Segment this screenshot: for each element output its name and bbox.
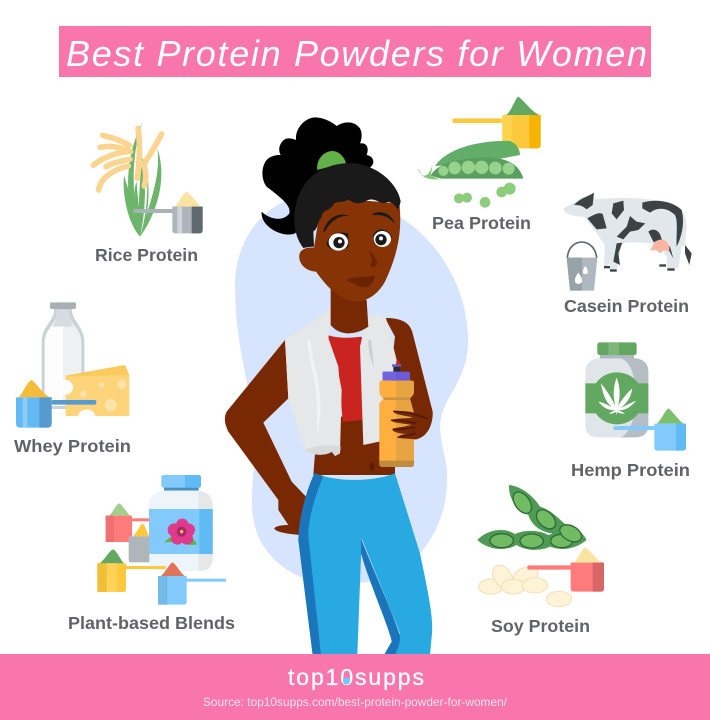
- udder: [650, 240, 669, 253]
- panel: plant-based blends: [68, 475, 235, 633]
- milk pail: [567, 242, 597, 291]
- face: [299, 198, 400, 301]
- label: Hemp Protein: [571, 460, 690, 480]
- label: Pea Protein: [432, 213, 531, 233]
- navel: [369, 462, 375, 471]
- nose: [369, 250, 377, 267]
- label: Soy Protein: [491, 616, 590, 636]
- scoop: [452, 97, 541, 148]
- label: Plant-based Blends: [68, 613, 235, 633]
- icon: milk, cheese and scoop: [16, 302, 129, 428]
- label: Rice Protein: [95, 245, 198, 265]
- cow: [563, 193, 692, 272]
- logo: top10supps: [288, 664, 424, 690]
- panel: casein protein: [563, 193, 692, 316]
- jar: [149, 475, 213, 571]
- label: Casein Protein: [564, 296, 689, 316]
- lower body: [225, 308, 433, 655]
- eyes: [327, 229, 392, 251]
- panel: rice protein: [93, 123, 203, 265]
- red scoop: [106, 503, 149, 542]
- grains: [93, 128, 162, 190]
- left arm: [225, 340, 306, 535]
- red top: [327, 335, 400, 422]
- woman figure: [225, 117, 433, 655]
- milk bottle: [42, 302, 84, 409]
- blue scoop: [158, 562, 226, 605]
- torso: [313, 417, 395, 475]
- right arm: [385, 318, 433, 439]
- beans: [479, 561, 572, 607]
- icon: cow and milk pail: [563, 193, 692, 291]
- pod: [418, 141, 523, 179]
- icon: jar, flower and scoops: [97, 475, 226, 605]
- cheese: [58, 365, 129, 416]
- scoop: [527, 547, 604, 592]
- panel: whey protein: [14, 302, 131, 456]
- head: [262, 117, 401, 333]
- panel: pea protein: [418, 97, 541, 233]
- leaves: [124, 123, 161, 237]
- icon: rice plant with scoop: [93, 123, 203, 237]
- towel: [285, 308, 397, 456]
- pods: [477, 485, 587, 550]
- title: Best Protein Powders for Women: [66, 33, 647, 74]
- eyebrows: [323, 212, 395, 232]
- yellow scoop: [97, 549, 166, 592]
- background blob: [235, 194, 468, 584]
- loose peas: [454, 183, 516, 208]
- leggings: [298, 473, 432, 655]
- panel: hemp protein: [571, 342, 690, 480]
- hand on bottle: [392, 398, 428, 439]
- source: Source: top10supps.com/best-protein-powder-for-women/: [203, 695, 508, 709]
- flower: [164, 519, 197, 545]
- grey scoop: [129, 523, 149, 562]
- neck: [331, 287, 368, 333]
- panel: soy protein: [477, 485, 604, 636]
- scoop: [133, 192, 203, 233]
- footer: [0, 654, 710, 720]
- label: Whey Protein: [14, 436, 131, 456]
- lips: [347, 276, 375, 287]
- hair bun: [262, 117, 373, 235]
- icon: pea pod and scoop: [418, 97, 541, 208]
- front hair: [294, 163, 401, 248]
- scoop: [613, 408, 686, 451]
- hair tie: [317, 151, 346, 170]
- jar: [585, 342, 648, 437]
- icon: hemp jar and scoop: [585, 342, 686, 451]
- scoop: [16, 380, 96, 428]
- hemp leaf: [598, 378, 636, 415]
- icon: soy pods, beans and scoop: [477, 485, 604, 607]
- water bottle: [379, 364, 414, 467]
